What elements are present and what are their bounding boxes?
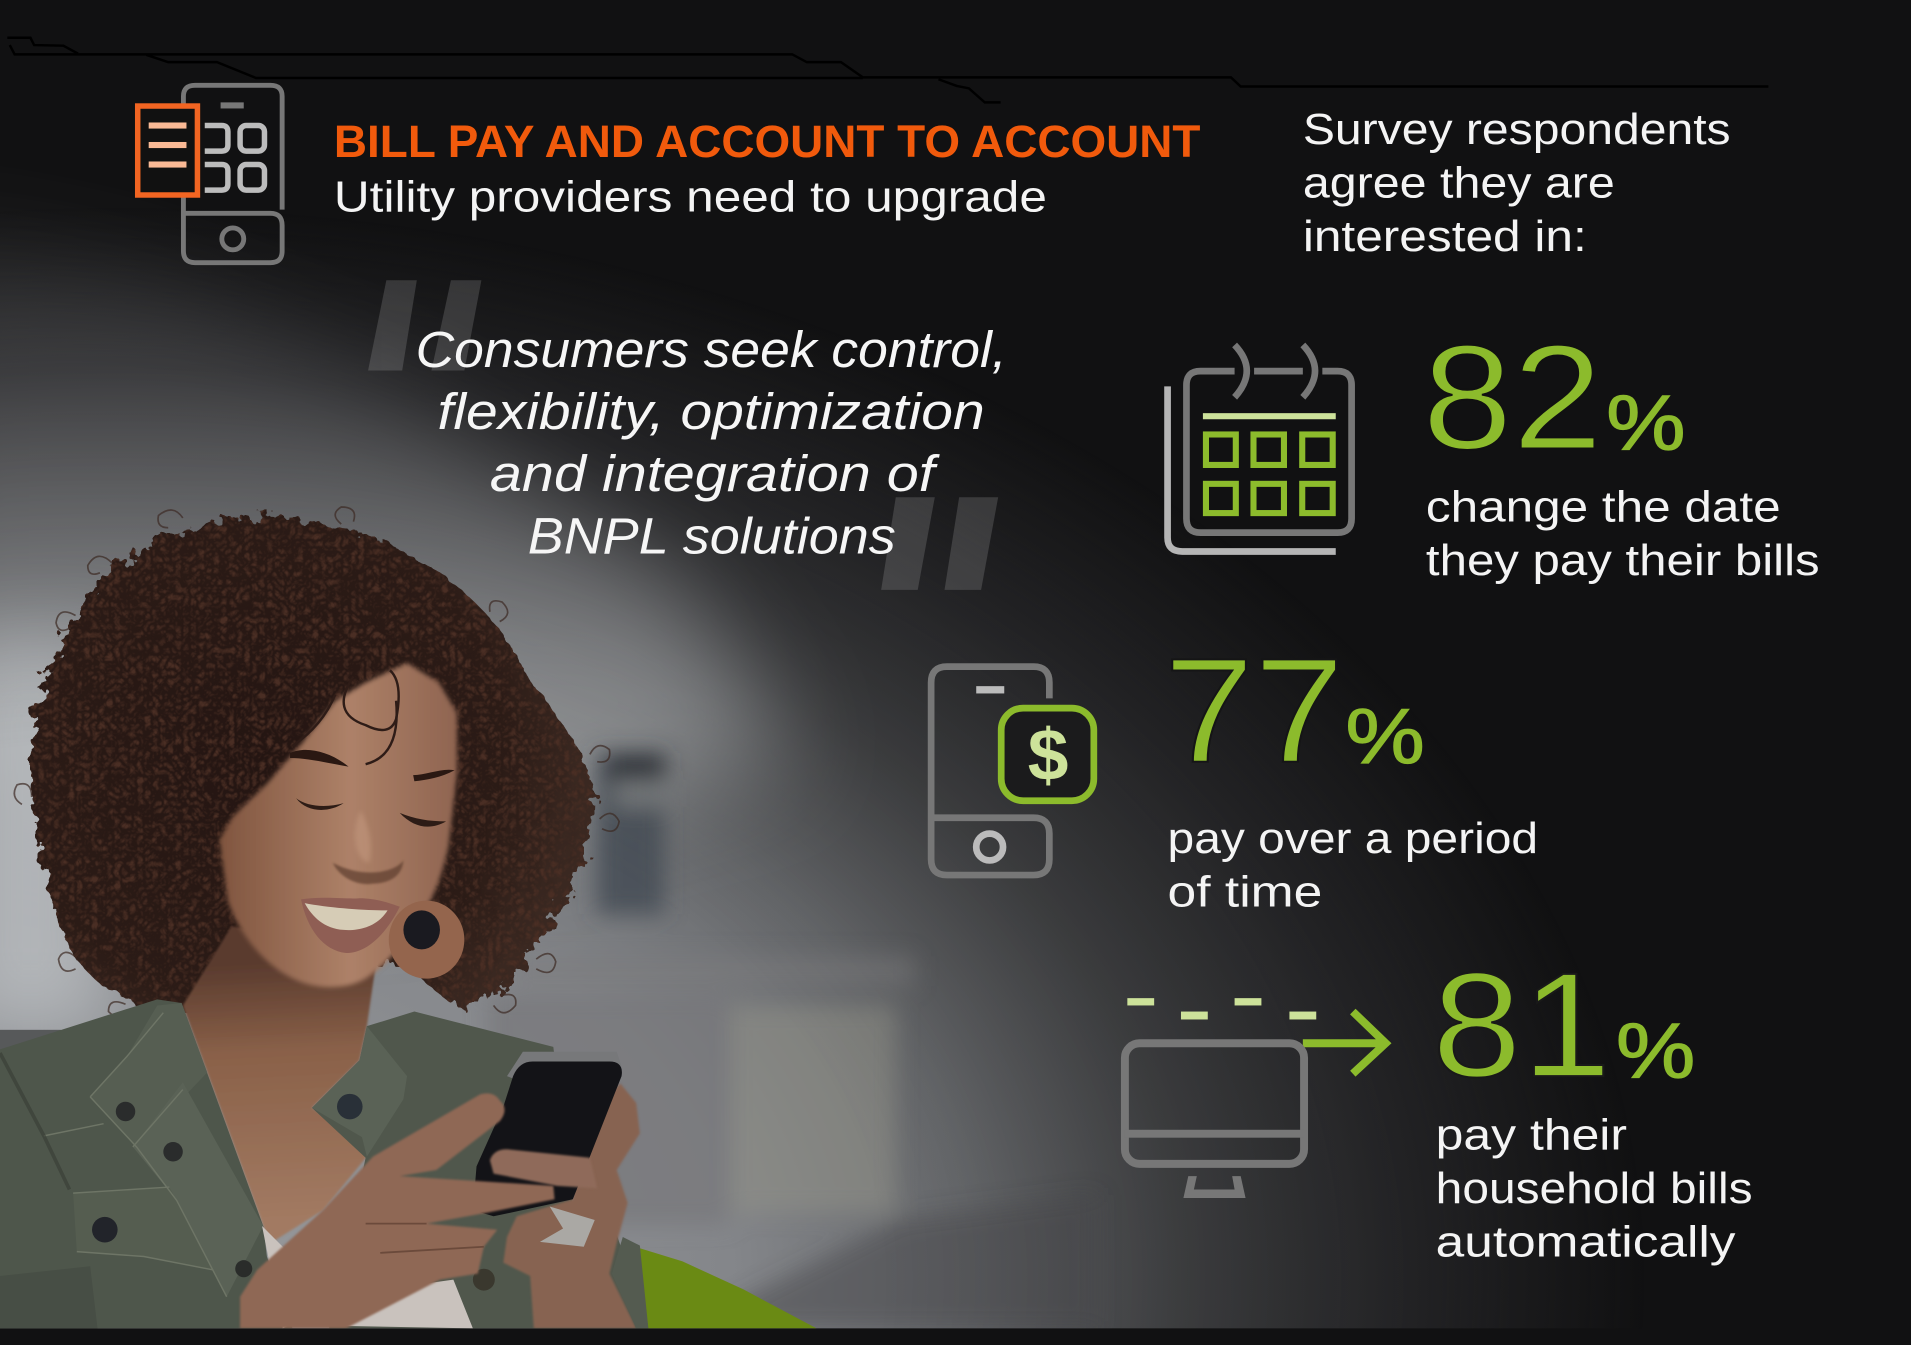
hair — [31, 517, 594, 1014]
subtitle: Utility providers need to upgrade — [334, 172, 1047, 221]
right hand — [503, 1083, 640, 1328]
stat: 77 percent: 77 — [1164, 627, 1344, 794]
stat: 82 percent: change the date — [1426, 483, 1781, 532]
quote — [416, 321, 1007, 564]
icon: phone with dollar: $ — [1028, 715, 1068, 796]
jacket — [0, 999, 292, 1328]
survey intro text — [1303, 105, 1731, 261]
forehead curls — [292, 670, 399, 764]
opening quotation mark — [368, 280, 481, 370]
stat: 77 percent: of time — [1168, 868, 1322, 917]
stat: 81 percent: 81 — [1432, 941, 1611, 1108]
left hand — [240, 1093, 555, 1328]
stat: 77 percent: % — [1346, 692, 1425, 780]
top circuit lines — [7, 38, 1768, 102]
stat: 82 percent: 82 — [1422, 313, 1603, 480]
stat: 82 percent: they pay their bills — [1426, 536, 1820, 585]
photo: woman using phone — [0, 126, 1592, 1328]
white shirt — [262, 1226, 473, 1328]
right thumb over phone — [490, 1149, 597, 1188]
quote: flexibility, optimization — [438, 383, 985, 440]
icon: calendar — [1168, 345, 1352, 551]
icon: phone with dollar — [931, 667, 1094, 875]
stat: 81 percent: pay their — [1436, 1110, 1627, 1159]
quote: and integration of — [490, 445, 940, 502]
phone — [473, 1052, 622, 1216]
ring — [540, 1207, 595, 1247]
title: BILL PAY AND ACCOUNT TO ACCOUNT — [334, 116, 1201, 167]
stat: 81 percent: household bills — [1436, 1164, 1753, 1213]
earring — [389, 901, 464, 979]
stat: 77 percent: pay over a period — [1168, 814, 1538, 863]
face — [219, 663, 457, 987]
stat: 81 percent: automatically — [1436, 1218, 1736, 1267]
quote: Consumers seek control, — [416, 321, 1007, 378]
survey intro text: interested in: — [1303, 212, 1587, 261]
header icon: phone with bill — [138, 85, 282, 263]
quote: BNPL solutions — [528, 507, 896, 564]
jacket cuff — [620, 1237, 648, 1328]
jacket details — [0, 1003, 495, 1328]
hair curls along the edge — [14, 507, 619, 1018]
icon: monitor with arrow — [1125, 998, 1386, 1198]
facial features — [290, 750, 455, 953]
blurred building background — [488, 753, 1097, 1328]
survey intro text: agree they are — [1303, 158, 1615, 207]
sofa — [635, 1247, 817, 1328]
stat: 81 percent: % — [1616, 1006, 1695, 1094]
closing quotation mark — [881, 497, 998, 590]
neck and chest — [183, 926, 378, 1243]
stat: 82 percent — [1422, 313, 1820, 585]
stat: 77 percent — [1164, 627, 1538, 917]
stat: 82 percent: % — [1606, 379, 1686, 467]
stat: 81 percent — [1432, 941, 1753, 1267]
survey intro text: Survey respondents — [1303, 105, 1731, 154]
